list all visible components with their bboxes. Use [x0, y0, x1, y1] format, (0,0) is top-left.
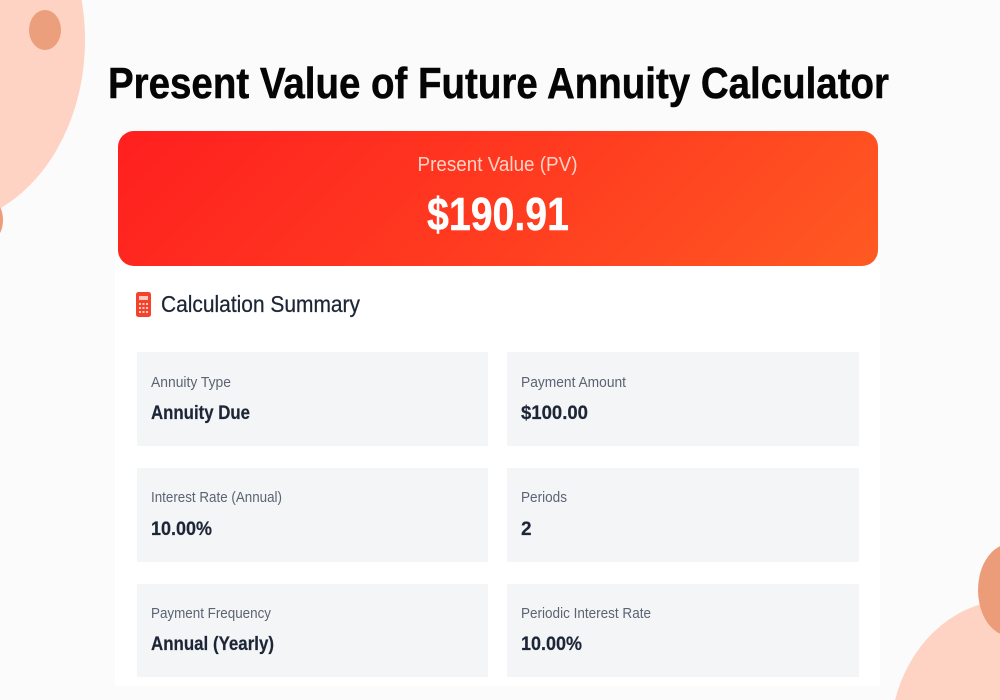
card: payment frequency: Annual (Yearly)	[151, 634, 274, 655]
card: interest rate: Interest Rate (Annual)	[151, 490, 282, 506]
panel: calculation summary	[115, 250, 880, 686]
card: periodic interest rate	[507, 584, 859, 677]
card: periodic interest rate: 10.00%	[521, 634, 582, 655]
label: present value: Present Value (PV)	[418, 154, 578, 176]
icon: calculator	[136, 292, 151, 317]
card: payment amount: Payment Amount	[521, 375, 626, 391]
card: periodic interest rate: Periodic Interest Rate	[521, 606, 651, 622]
result banner	[118, 131, 878, 266]
card: annuity type	[137, 352, 488, 446]
decorative shapes: top left	[0, 0, 85, 233]
decorative shapes: bottom right	[895, 546, 1000, 700]
card: interest rate: 10.00%	[151, 519, 212, 540]
value: present value: $190.91	[427, 188, 569, 240]
heading text: Calculation Summary	[161, 291, 360, 317]
card: payment frequency: Payment Frequency	[151, 606, 272, 622]
card: annuity type: Annuity Type	[151, 375, 231, 391]
card: payment frequency	[137, 584, 488, 677]
card: payment amount: $100.00	[521, 403, 588, 424]
card: payment amount	[507, 352, 859, 446]
card: annuity type: Annuity Due	[151, 403, 250, 424]
card: periods: 2	[521, 519, 532, 540]
card: periods	[507, 468, 859, 562]
heading: calculation summary	[136, 291, 360, 317]
card: interest rate	[137, 468, 488, 562]
card: periods: Periods	[521, 490, 567, 506]
title: Present Value of Future Annuity Calculator	[108, 59, 889, 108]
